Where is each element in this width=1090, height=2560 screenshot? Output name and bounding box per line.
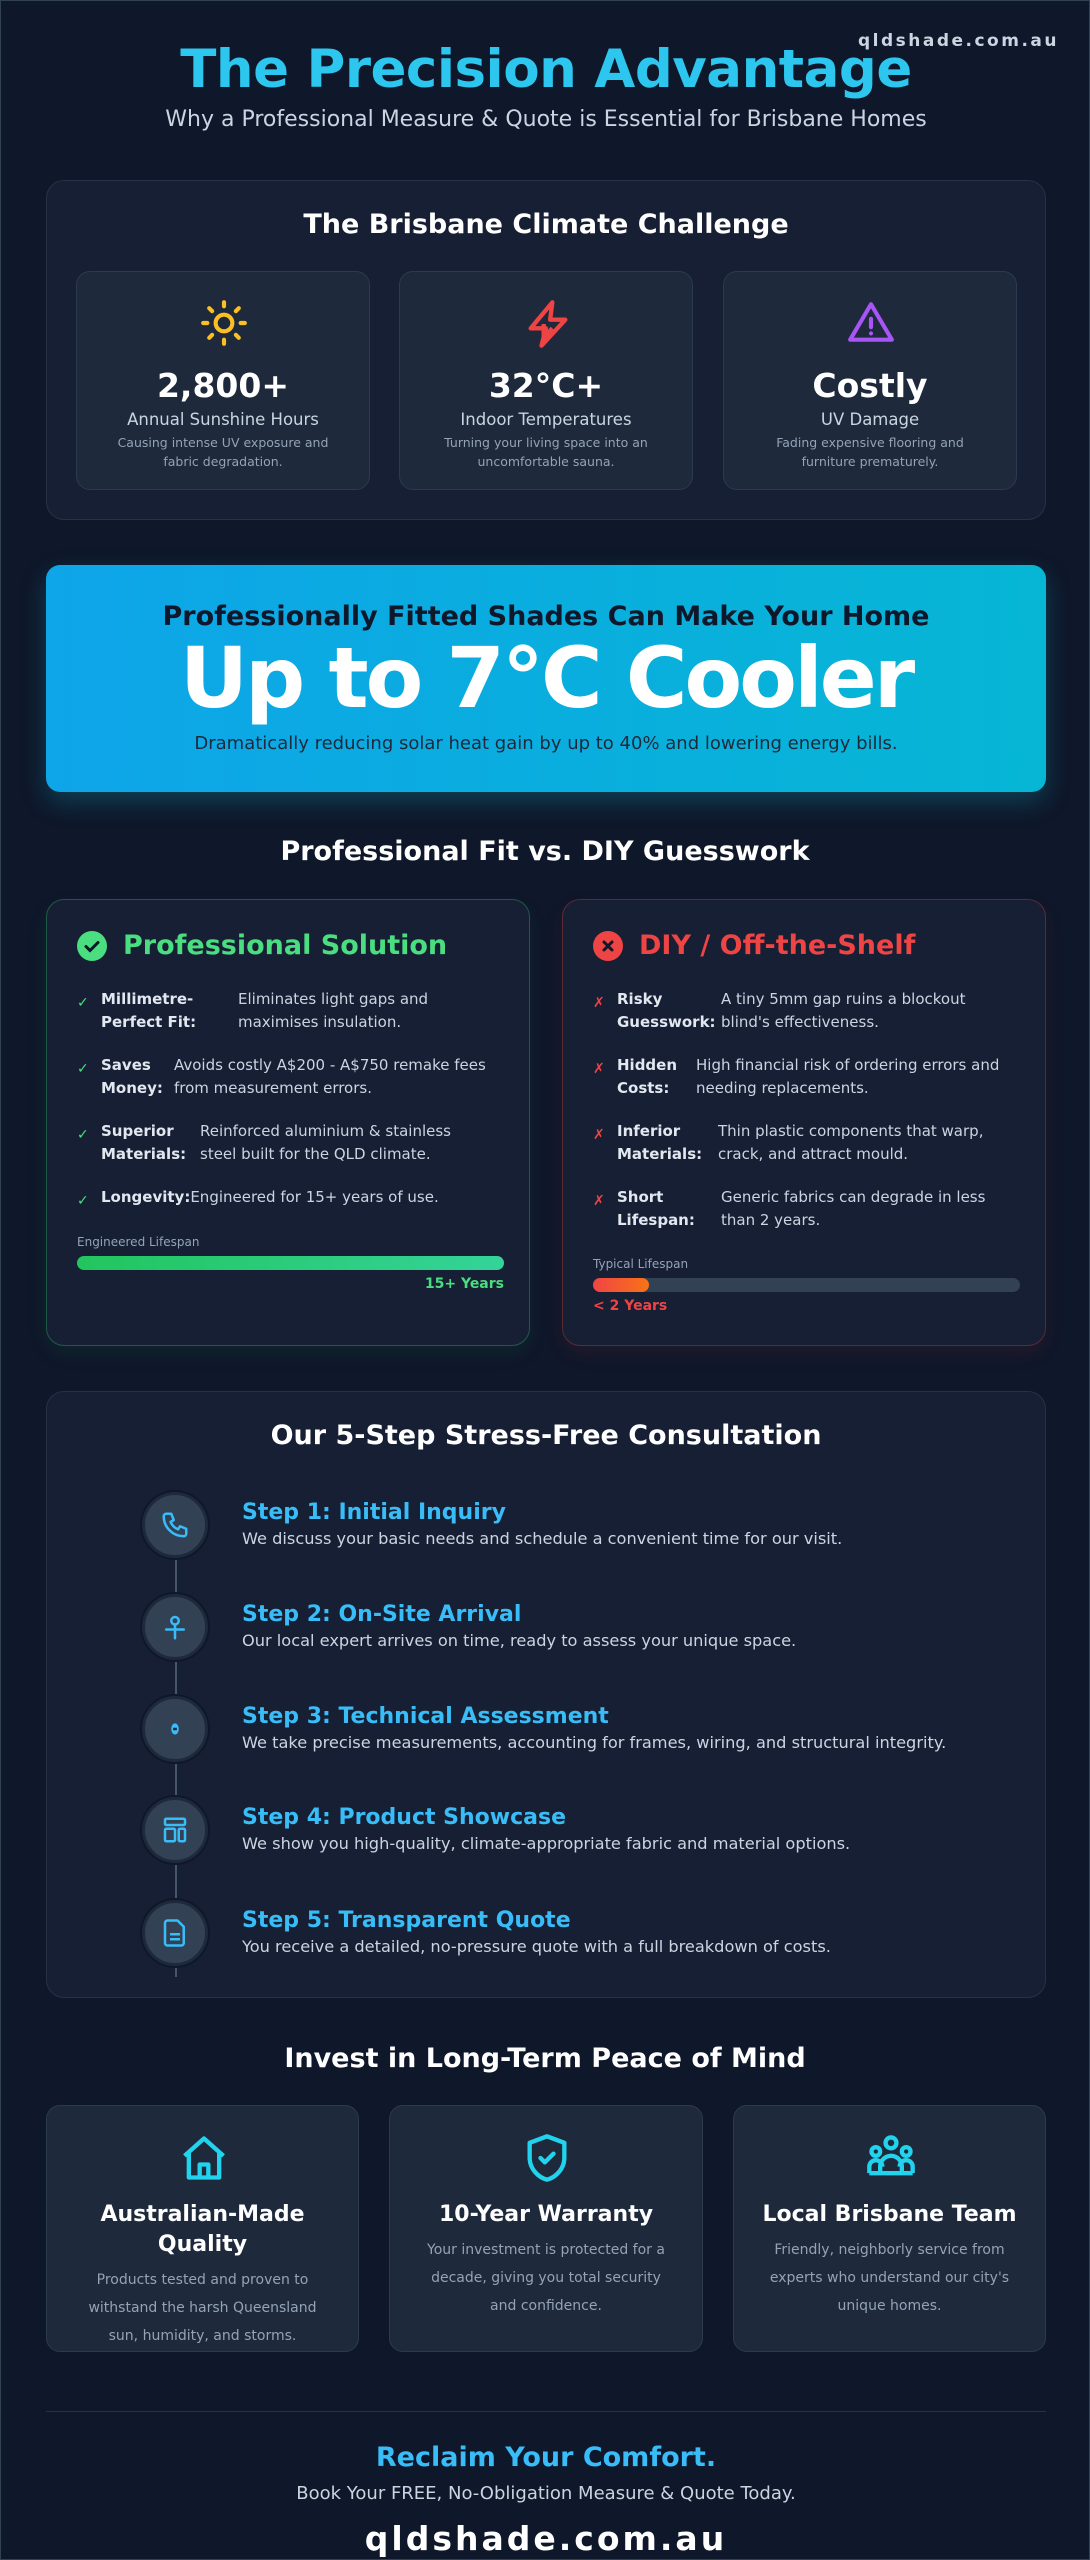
pro list (77, 990, 486, 1209)
pro heading: Professional Solution (123, 930, 447, 961)
icon: x circle (593, 931, 623, 961)
step 2 (140, 1592, 796, 1662)
card: sunshine (76, 271, 370, 490)
card: australian made (46, 2105, 359, 2352)
pro list: Eliminates light gaps and maximises insulation. (238, 990, 428, 1031)
heading: climate: The Brisbane Climate Challenge (303, 209, 789, 240)
icon: warning (848, 302, 894, 342)
banner: 7C cooler (46, 565, 1046, 792)
step 2: Our local expert arrives on time, ready to assess your unique space. (242, 1631, 796, 1650)
pro list: ✓ (77, 1061, 89, 1077)
card: local team: Friendly, neighborly service from experts who understand our city's unique homes. (770, 2242, 1009, 2314)
card: UV damage (723, 271, 1017, 490)
pro list: Materials: (101, 1145, 186, 1163)
diy list (593, 990, 999, 1229)
card: australian made: Quality (158, 2232, 247, 2257)
pro lifespan bar (77, 1235, 504, 1292)
subtitle: Why a Professional Measure & Quote is Essential for Brisbane Homes (165, 107, 927, 132)
step 1 (140, 1490, 842, 1560)
icon: phone (142, 1492, 208, 1558)
diy list: A tiny 5mm gap ruins a blockout blind's effectiveness. (721, 990, 966, 1031)
pro list: Engineered for 15+ years of use. (190, 1188, 439, 1206)
diy list: Risky (617, 990, 662, 1008)
diy list: ✗ (593, 1127, 605, 1143)
diy list: Short (617, 1188, 663, 1206)
pro list: Superior (101, 1122, 174, 1140)
card: indoor temps (399, 271, 693, 490)
panel: 5 steps (46, 1391, 1046, 1998)
pro lifespan bar: Engineered Lifespan (77, 1235, 199, 1249)
card: indoor temps: 32°C+ (489, 366, 603, 405)
diy list: Inferior (617, 1122, 680, 1140)
diy list: Lifespan: (617, 1211, 695, 1229)
card: indoor temps: Turning your living space into an uncomfortable sauna. (444, 435, 648, 469)
diy lifespan bar: Typical Lifespan (593, 1257, 688, 1271)
divider (46, 2411, 1046, 2412)
pro list: Perfect Fit: (101, 1013, 196, 1031)
card: local team: Local Brisbane Team (762, 2202, 1017, 2227)
step 3 (140, 1694, 946, 1764)
icon: sun (201, 300, 247, 346)
step 2: Step 2: On-Site Arrival (242, 1602, 521, 1627)
diy list: Guesswork: (617, 1013, 716, 1031)
icon: person (142, 1594, 208, 1660)
diy list: ✗ (593, 1061, 605, 1077)
icon: shield (528, 2134, 566, 2182)
step 5 (140, 1898, 831, 1968)
panel: professional (46, 899, 530, 1346)
icon: check circle (77, 931, 107, 961)
step 4: We show you high-quality, climate-appropriate fabric and material options. (242, 1834, 850, 1853)
step 3: We take precise measurements, accounting for frames, wiring, and structural integrity. (242, 1733, 946, 1752)
card: australian made: Australian-Made (100, 2202, 305, 2227)
banner line: Professionally Fitted Shades Can Make Your Home (162, 601, 930, 632)
pro list: ✓ (77, 995, 89, 1011)
panel: DIY (562, 899, 1046, 1346)
diy list: Generic fabrics can degrade in less than 2 years. (721, 1188, 985, 1229)
step 3: Step 3: Technical Assessment (242, 1704, 609, 1729)
diy lifespan bar (592, 1257, 1020, 1314)
card: local team (733, 2105, 1046, 2352)
diy list: High financial risk of ordering errors and needing replacements. (696, 1056, 999, 1097)
card: sunshine: 2,800+ (157, 366, 289, 405)
diy heading: DIY / Off-the-Shelf (639, 930, 915, 961)
diy list: Hidden (617, 1056, 677, 1074)
card: sunshine: Annual Sunshine Hours (127, 410, 319, 429)
card: UV damage: Costly (812, 366, 928, 405)
diy list: ✗ (593, 995, 605, 1011)
icon: measure (142, 1696, 208, 1762)
step 5: Step 5: Transparent Quote (242, 1908, 571, 1933)
diy list: Costs: (617, 1079, 669, 1097)
card: warranty: 10-Year Warranty (439, 2202, 653, 2227)
card: warranty: Your investment is protected for a decade, giving you total security and confidence. (427, 2242, 665, 2314)
pro list: Money: (101, 1079, 163, 1097)
pro list: Reinforced aluminium & stainless steel built for the QLD climate. (200, 1122, 451, 1163)
card: indoor temps: Indoor Temperatures (460, 410, 632, 429)
banner desc: Dramatically reducing solar heat gain by up to 40% and lowering energy bills. (194, 733, 898, 754)
url top-right: qldshade.com.au (858, 31, 1059, 51)
title: The Precision Advantage (180, 39, 912, 100)
cta heading: Reclaim Your Comfort. (376, 2442, 716, 2473)
pro list: Millimetre- (101, 990, 193, 1008)
icon: document (142, 1900, 208, 1966)
step 5: You receive a detailed, no-pressure quote with a full breakdown of costs. (242, 1937, 831, 1956)
pro list: ✓ (77, 1127, 89, 1143)
cta text: Book Your FREE, No-Obligation Measure & Quote Today. (296, 2483, 796, 2504)
pro list: Saves (101, 1056, 151, 1074)
step 1: Step 1: Initial Inquiry (242, 1500, 506, 1525)
cta url: qldshade.com.au (365, 2519, 727, 2558)
step 4 (140, 1795, 850, 1865)
pro lifespan bar: 15+ Years (425, 1276, 504, 1292)
card: australian made: Products tested and proven to withstand the harsh Queensland sun, humidity, and storms. (88, 2272, 317, 2344)
icon: people (867, 2135, 915, 2176)
step 1: We discuss your basic needs and schedule a convenient time for our visit. (242, 1529, 842, 1548)
pro list: Longevity: (101, 1188, 190, 1206)
diy list: ✗ (593, 1193, 605, 1209)
card: UV damage: UV Damage (821, 410, 919, 429)
diy lifespan bar: < 2 Years (593, 1298, 667, 1314)
card: warranty (389, 2105, 703, 2352)
heading: steps: Our 5-Step Stress-Free Consultation (271, 1420, 821, 1451)
banner big text: Up to 7°C Cooler (180, 629, 912, 727)
diy list: Thin plastic components that warp, crack, and attract mould. (718, 1122, 983, 1163)
heading: invest: Invest in Long-Term Peace of Mind (284, 2043, 806, 2074)
icon: layout (142, 1797, 208, 1863)
step 4: Step 4: Product Showcase (242, 1805, 566, 1830)
icon: lightning (528, 300, 568, 348)
diy list: Materials: (617, 1145, 702, 1163)
panel: climate challenge (46, 180, 1046, 520)
pro list: ✓ (77, 1193, 89, 1209)
heading: comparison: Professional Fit vs. DIY Guesswork (280, 836, 810, 867)
card: UV damage: Fading expensive flooring and furniture prematurely. (776, 435, 964, 469)
pro list: Avoids costly A$200 - A$750 remake fees from measurement errors. (174, 1056, 486, 1097)
card: sunshine: Causing intense UV exposure and fabric degradation. (118, 435, 328, 469)
icon: house (183, 2136, 225, 2180)
timeline line (175, 1522, 177, 1977)
